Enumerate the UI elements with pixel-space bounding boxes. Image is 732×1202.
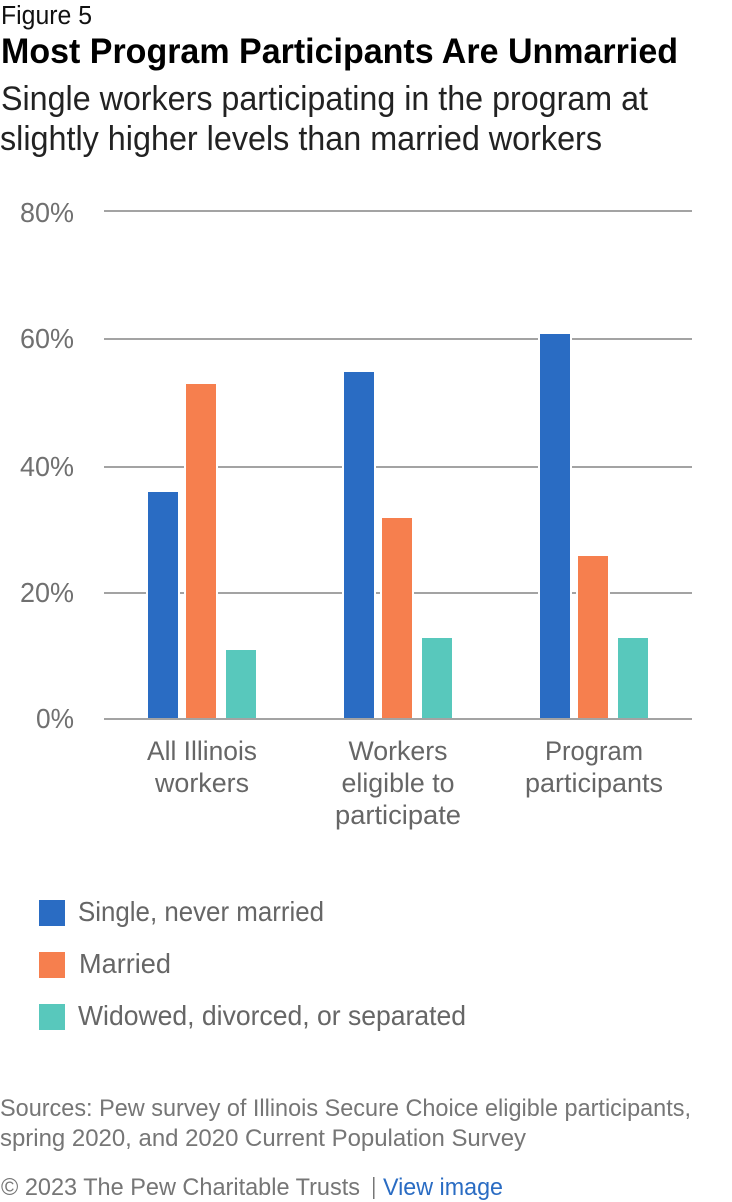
subtitle bbox=[0, 80, 649, 158]
x axis labels: All Illinois bbox=[147, 736, 257, 766]
legend: Single, never married bbox=[78, 896, 324, 927]
bars: All Illinois workers bbox=[146, 382, 258, 718]
figure label: Figure 5 bbox=[1, 2, 92, 30]
bars: Workers eligible to participate bbox=[342, 370, 454, 718]
subtitle: Single workers participating in the program at bbox=[1, 80, 649, 118]
bar chart bbox=[20, 197, 692, 830]
x axis labels bbox=[147, 736, 663, 830]
x axis labels: Workers bbox=[348, 736, 448, 766]
copyright line: © 2023 The Pew Charitable Trusts bbox=[1, 1174, 360, 1201]
y axis labels: 80% bbox=[20, 197, 74, 228]
x axis labels: workers bbox=[154, 768, 249, 798]
sources note bbox=[0, 1095, 691, 1152]
legend bbox=[39, 896, 466, 1031]
title: Most Program Participants Are Unmarried bbox=[1, 32, 678, 71]
y axis labels: 20% bbox=[20, 577, 74, 608]
legend: Married bbox=[79, 948, 171, 979]
y axis labels bbox=[20, 197, 74, 734]
sources note: spring 2020, and 2020 Current Population Survey bbox=[0, 1125, 526, 1152]
x axis labels: participants bbox=[525, 768, 663, 798]
y axis labels: 40% bbox=[20, 451, 74, 482]
x axis labels: Program bbox=[545, 736, 643, 766]
subtitle: slightly higher levels than married workers bbox=[0, 120, 602, 158]
x axis labels: eligible to bbox=[342, 768, 454, 798]
bars: Program participants bbox=[538, 332, 650, 718]
y axis labels: 60% bbox=[20, 323, 74, 354]
legend: Widowed, divorced, or separated bbox=[78, 1000, 466, 1031]
sources note: Sources: Pew survey of Illinois Secure Choice eligible participants, bbox=[0, 1095, 691, 1122]
y axis labels: 0% bbox=[36, 703, 74, 734]
x axis labels: participate bbox=[335, 800, 461, 830]
copyright line: View image bbox=[383, 1174, 503, 1201]
